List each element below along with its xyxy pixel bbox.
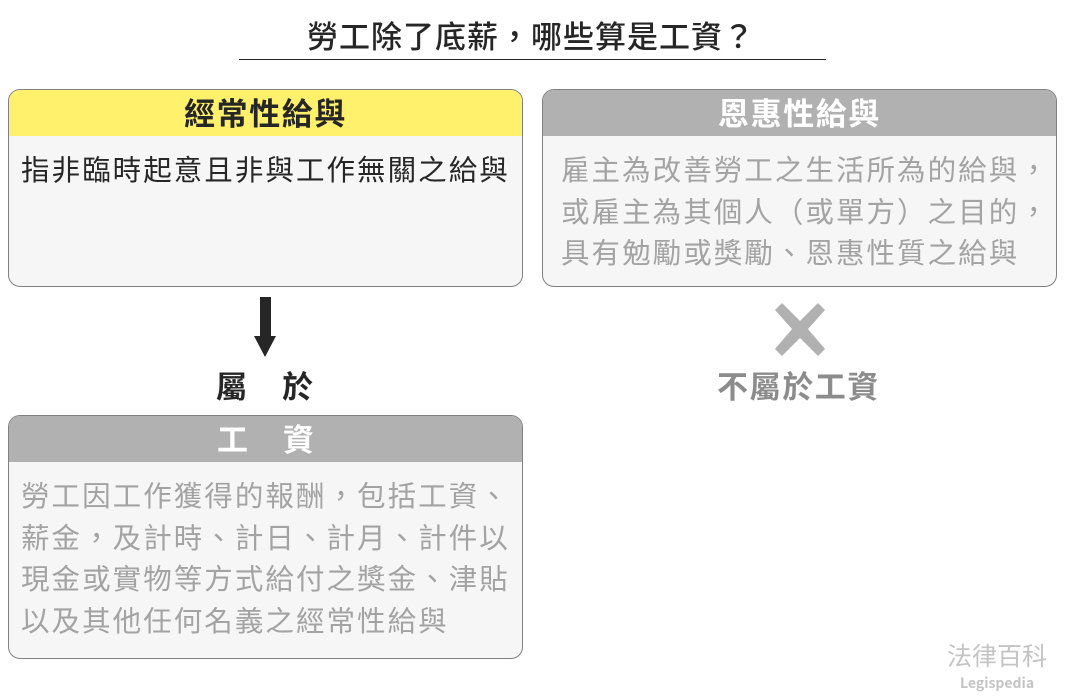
panel heading: wages: 工資 bbox=[217, 423, 349, 458]
panel text: wages: 現金或實物等方式給付之獎金、津貼 bbox=[21, 564, 510, 596]
panel heading: wages bbox=[9, 416, 522, 462]
panel text: gratuity payments bbox=[561, 155, 1050, 270]
panel text: gratuity payments: 或雇主為其個人（或單方）之目的， bbox=[561, 196, 1050, 228]
logo: Legispedia bbox=[947, 643, 1047, 693]
panel text: regular payments: 指非臨時起意且非與工作無關之給與 bbox=[21, 155, 510, 187]
panel heading: gratuity payments: 恩惠性給與 bbox=[718, 97, 881, 132]
panel: wages bbox=[8, 415, 523, 659]
arrow: down to belongs bbox=[254, 297, 276, 357]
icon: cross mark bbox=[775, 303, 825, 356]
panel: gratuity payments bbox=[542, 89, 1057, 287]
panel text: wages: 薪金，及計時、計日、計月、計件以 bbox=[21, 522, 510, 554]
panel text: wages: 以及其他任何名義之經常性給與 bbox=[21, 606, 449, 638]
panel heading: regular payments bbox=[9, 90, 522, 136]
title: 勞工除了底薪，哪些算是工資？ bbox=[307, 20, 755, 55]
panel text: wages bbox=[21, 481, 510, 638]
panel text: wages: 勞工因工作獲得的報酬，包括工資、 bbox=[21, 481, 510, 513]
title underline bbox=[239, 59, 826, 60]
label: belongs to: 屬於 bbox=[216, 370, 348, 405]
panel text: gratuity payments: 具有勉勵或獎勵、恩惠性質之給與 bbox=[561, 238, 1019, 270]
label: does not belong to wages: 不屬於工資 bbox=[717, 370, 880, 405]
panel heading: gratuity payments bbox=[543, 90, 1056, 136]
logo text: Chinese name: 法律百科 bbox=[947, 643, 1047, 671]
logo text: Latin name: Legispedia bbox=[960, 673, 1034, 693]
panel text: gratuity payments: 雇主為改善勞工之生活所為的給與， bbox=[561, 155, 1050, 187]
panel: regular payments bbox=[8, 89, 523, 287]
panel heading: regular payments: 經常性給與 bbox=[184, 97, 347, 132]
